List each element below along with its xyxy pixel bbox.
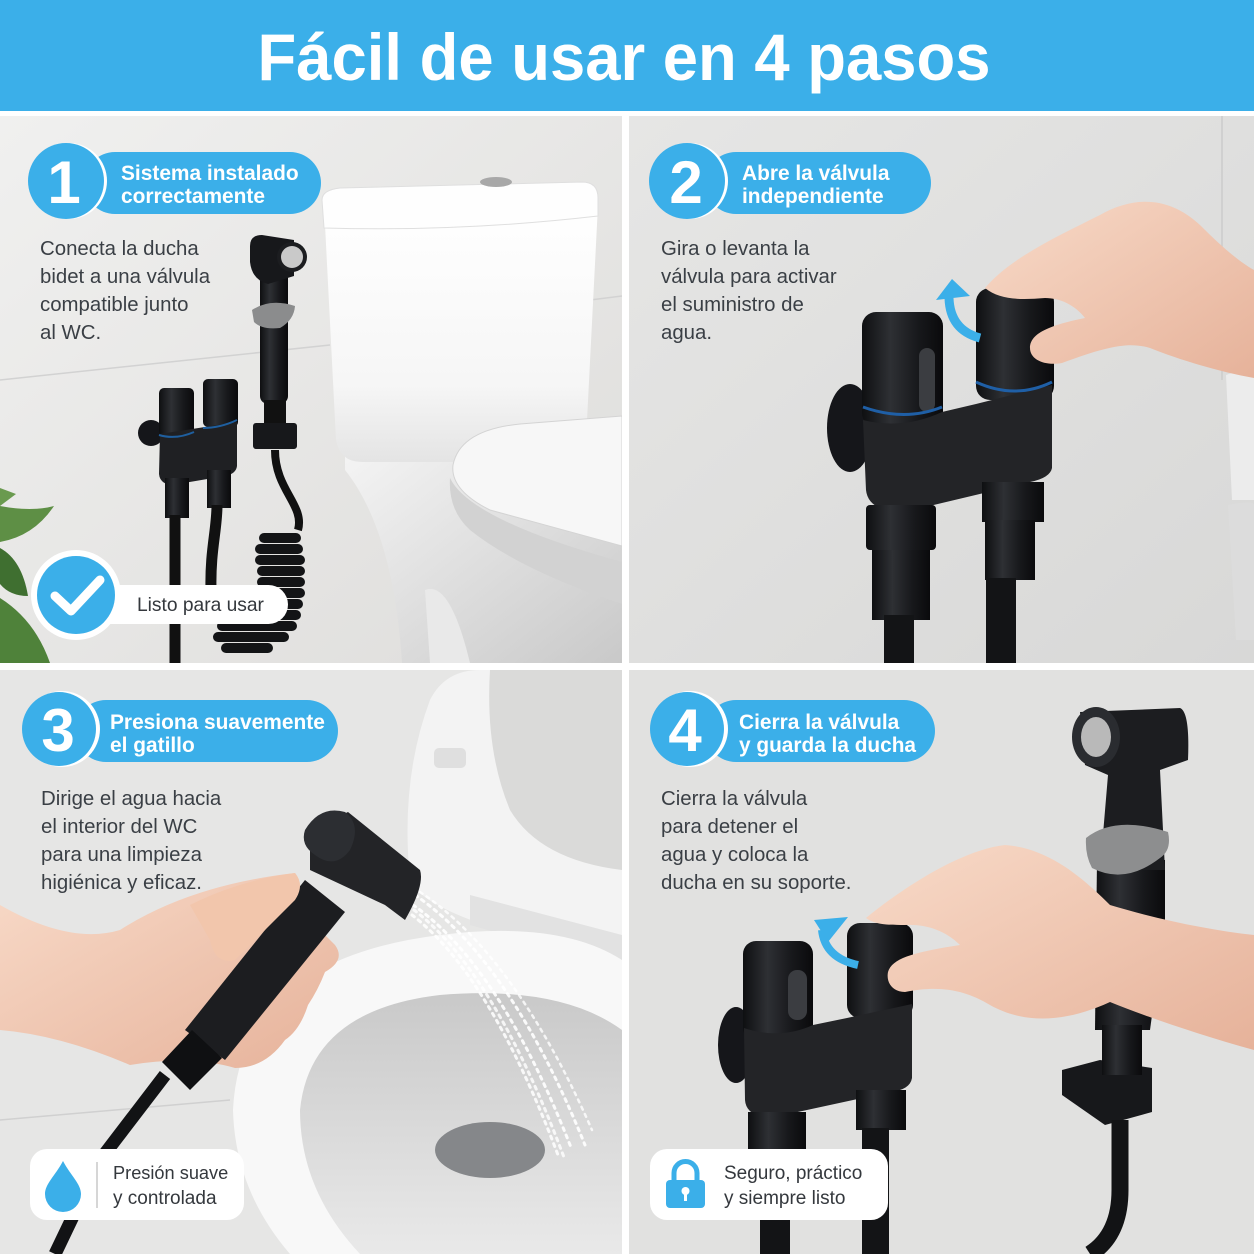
- bidet sprayer on holder: [218, 235, 307, 648]
- panel: step 1: [0, 116, 622, 663]
- step 4 heading: [650, 691, 935, 767]
- sprayer: [162, 810, 421, 1090]
- icon: water drop: [45, 1161, 81, 1212]
- sprayer in holder: [1062, 707, 1188, 1254]
- badge: seguro: Seguro, práctico: [724, 1163, 862, 1184]
- step 1 text: compatible junto: [40, 294, 188, 316]
- step 3 text: para una limpieza: [41, 844, 203, 866]
- water stream: [412, 892, 592, 1160]
- step 3 heading: Presiona suavemente: [110, 711, 325, 734]
- badge: seguro: [650, 1149, 888, 1220]
- step 1 text: bidet a una válvula: [40, 266, 211, 288]
- step 3 heading: [22, 691, 338, 767]
- title banner: [0, 0, 1254, 111]
- step 4 text: agua y coloca la: [661, 844, 809, 866]
- step 4 heading: 4: [668, 697, 702, 764]
- valve close-up: [827, 288, 1054, 663]
- step 1 heading: Sistema instalado: [121, 162, 299, 185]
- step 1 heading: [28, 143, 321, 219]
- valve close-up: [718, 923, 913, 1254]
- step 2 heading: independiente: [742, 185, 884, 208]
- icon: padlock: [666, 1162, 705, 1208]
- step 4 heading: Cierra la válvula: [739, 711, 900, 734]
- badge: presion suave: Presión suave: [113, 1163, 228, 1183]
- panel: step 2: [629, 116, 1254, 663]
- title banner: Fácil de usar en 4 pasos: [258, 20, 990, 94]
- step 3 text: el interior del WC: [41, 816, 197, 838]
- step 2 heading: 2: [669, 149, 703, 216]
- arm and hand: [0, 873, 339, 1068]
- panel: step 3: [0, 670, 622, 1254]
- step 2 heading: [649, 143, 931, 219]
- step 1 text: al WC.: [40, 322, 101, 344]
- step 3 heading: el gatillo: [110, 734, 195, 757]
- arrow head: [936, 279, 970, 300]
- toilet bowl: [233, 670, 622, 1254]
- step 2 text: válvula para activar: [661, 266, 837, 288]
- step 3 heading: 3: [41, 697, 75, 764]
- step 4 text: Cierra la válvula: [661, 788, 808, 810]
- step 2 text: Gira o levanta la: [661, 238, 810, 260]
- arrow head down: [814, 917, 848, 942]
- badge: listo para usar: Listo para usar: [137, 595, 265, 616]
- arrow: turn close: [822, 930, 858, 965]
- badge: presion suave: [30, 1149, 244, 1220]
- step 4 heading: y guarda la ducha: [739, 734, 916, 757]
- toilet illustration: [322, 177, 622, 663]
- hand: [985, 202, 1254, 378]
- step 1 text: Conecta la ducha: [40, 238, 199, 260]
- arrow: turn up: [949, 298, 980, 338]
- panel: step 4: [629, 670, 1254, 1254]
- step 2 heading: Abre la válvula: [742, 162, 890, 185]
- step 4 text: para detener el: [661, 816, 798, 838]
- step 3 text: Dirige el agua hacia: [41, 788, 222, 810]
- badge: seguro: y siempre listo: [724, 1188, 845, 1209]
- step 4 text: ducha en su soporte.: [661, 872, 851, 894]
- thumb: [190, 873, 300, 932]
- step 2 text: agua.: [661, 322, 712, 344]
- hose: [55, 1075, 165, 1254]
- badge: listo para usar: [31, 550, 288, 640]
- step 1 heading: correctamente: [121, 185, 265, 208]
- step 1 heading: 1: [47, 149, 81, 216]
- step 2 text: el suministro de: [661, 294, 804, 316]
- hand: [866, 845, 1254, 1050]
- valve: [138, 379, 238, 663]
- plant: [0, 488, 54, 663]
- badge: presion suave: y controlada: [113, 1188, 217, 1209]
- step 3 text: higiénica y eficaz.: [41, 872, 202, 894]
